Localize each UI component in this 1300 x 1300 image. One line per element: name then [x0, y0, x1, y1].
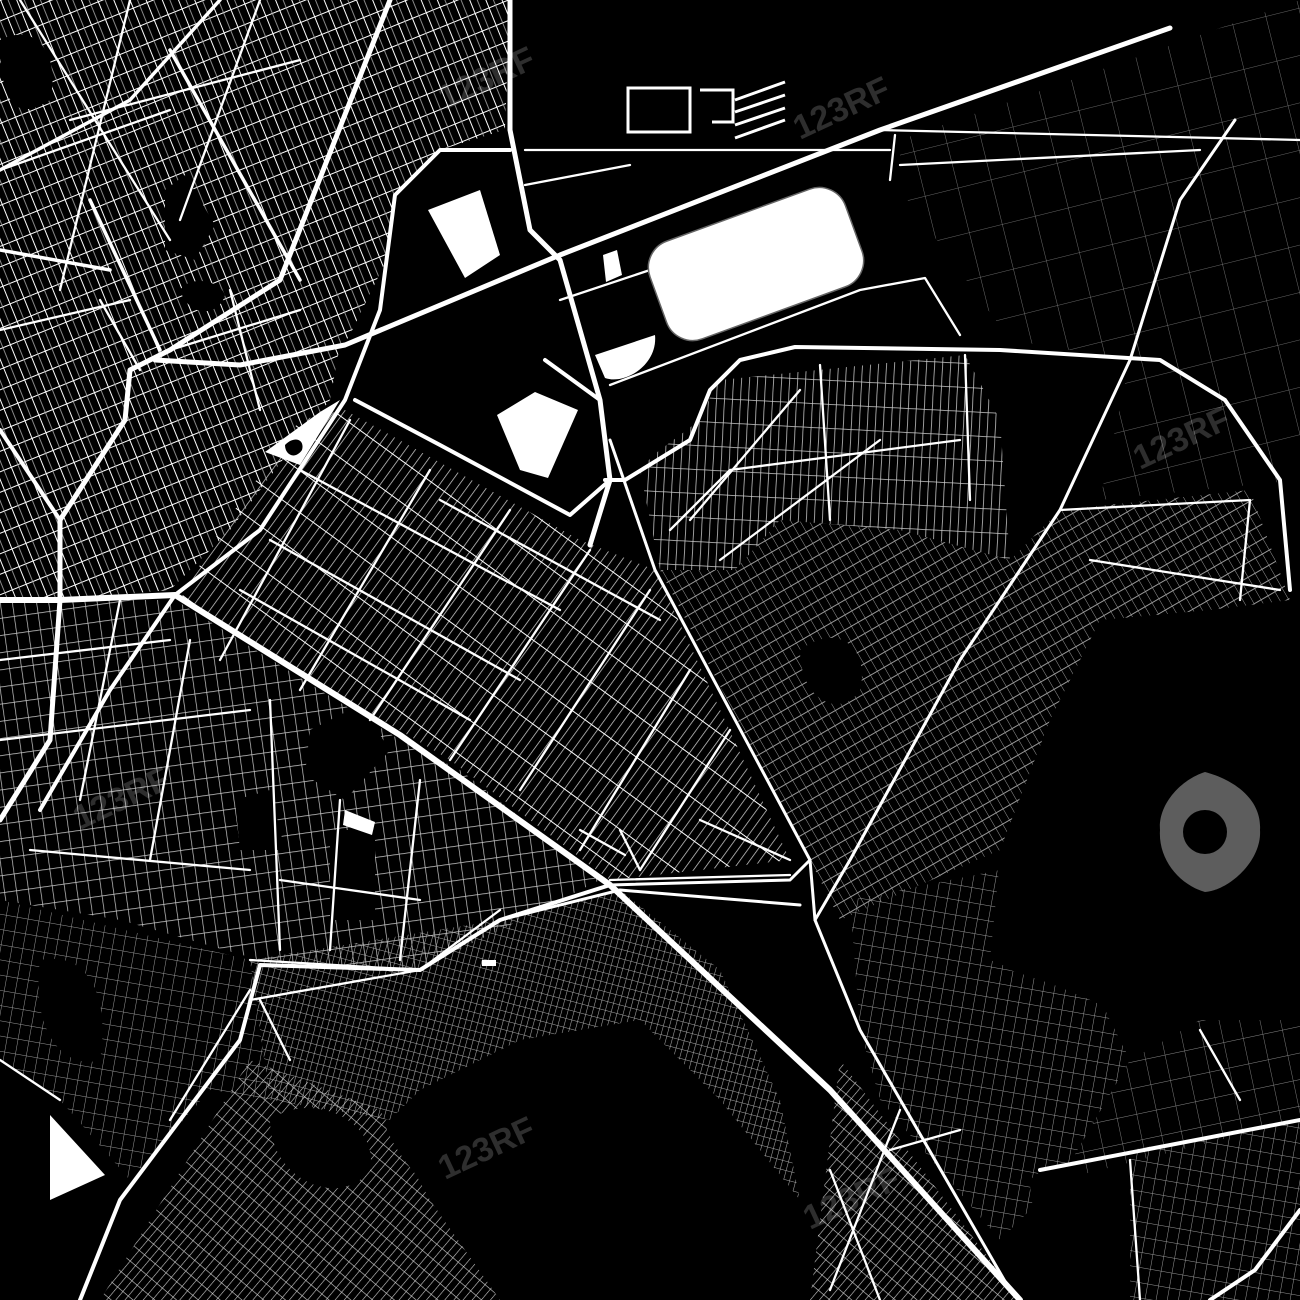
block: south-west triangle: [50, 1115, 105, 1200]
district: north-east fan: [640, 355, 1010, 570]
open area: park west: [305, 705, 390, 800]
airport plots outline: [628, 82, 785, 138]
airport ground: [345, 0, 1010, 540]
open area: bottom right hill: [1030, 1166, 1095, 1241]
road: airport diagonal: [155, 28, 1170, 365]
park: dark spots: [180, 281, 303, 455]
open area: south-west park: [38, 959, 103, 1062]
road: bottom right: [1040, 1120, 1300, 1300]
road: airport inner loop: [355, 360, 610, 515]
landmark: airport platform: [640, 180, 872, 348]
road: west avenue: [0, 150, 510, 810]
district: north-west dense grid: [0, 0, 510, 600]
road: hill connector: [500, 860, 810, 920]
district: west middle: [0, 600, 600, 970]
block: north-west hangar: [428, 190, 500, 278]
district: south-east corner: [1130, 1120, 1300, 1300]
road: north-east ring: [605, 347, 1290, 590]
district: south centre fine streets: [250, 890, 800, 1200]
open area: park near white block: [330, 830, 375, 920]
district: lower right slopes: [850, 870, 1130, 1240]
airport and surroundings mask: [345, 0, 1010, 540]
open area: eastern volcano: [990, 620, 1300, 1040]
watermark text: 123RF: [432, 1110, 541, 1187]
district: bottom centre grid: [810, 1060, 1020, 1300]
district: south-west: [0, 900, 270, 1180]
district: sparse east strip: [1060, 1020, 1300, 1180]
district: top right sparse streets: [900, 0, 1300, 500]
watermark text: 123RF: [1127, 400, 1236, 477]
watermark icon: [1160, 772, 1260, 892]
watermark text: 123RF: [797, 1160, 906, 1237]
road: great south-east diagonal: [0, 595, 1020, 1300]
block: small terminal: [603, 250, 622, 282]
block: stadium lot: [497, 392, 578, 478]
watermark text: 123RF: [787, 70, 896, 147]
watermark text: 123RF: [432, 40, 541, 117]
road: north-west avenue: [0, 0, 390, 820]
district: central diagonal grid: [180, 410, 790, 880]
block: half disc: [595, 335, 655, 379]
open area: southern hill: [270, 1108, 371, 1188]
open area: southern crater: [385, 1030, 730, 1270]
landmark: white blocks: [50, 190, 655, 1200]
road: airport north-south: [510, 0, 610, 545]
open area: top left park: [0, 35, 53, 109]
road: south-west avenue: [80, 885, 610, 1300]
district: hills east of centre: [660, 490, 1290, 920]
district: bottom left: [100, 1060, 500, 1300]
block: park ornament: [265, 400, 340, 465]
open area: crater hill: [800, 638, 862, 704]
road: north avenue top left: [0, 0, 300, 350]
block: narrow rectangle: [343, 810, 375, 835]
open area: west parkland blocks: [235, 790, 285, 850]
watermark text: 123RF: [67, 760, 176, 837]
block: small rectangle: [482, 960, 496, 966]
road: south-east connector: [610, 440, 1010, 1290]
park ornaments: [180, 281, 303, 455]
open area: park north-west: [165, 175, 215, 260]
road: north-east to centre diagonal: [815, 120, 1235, 920]
